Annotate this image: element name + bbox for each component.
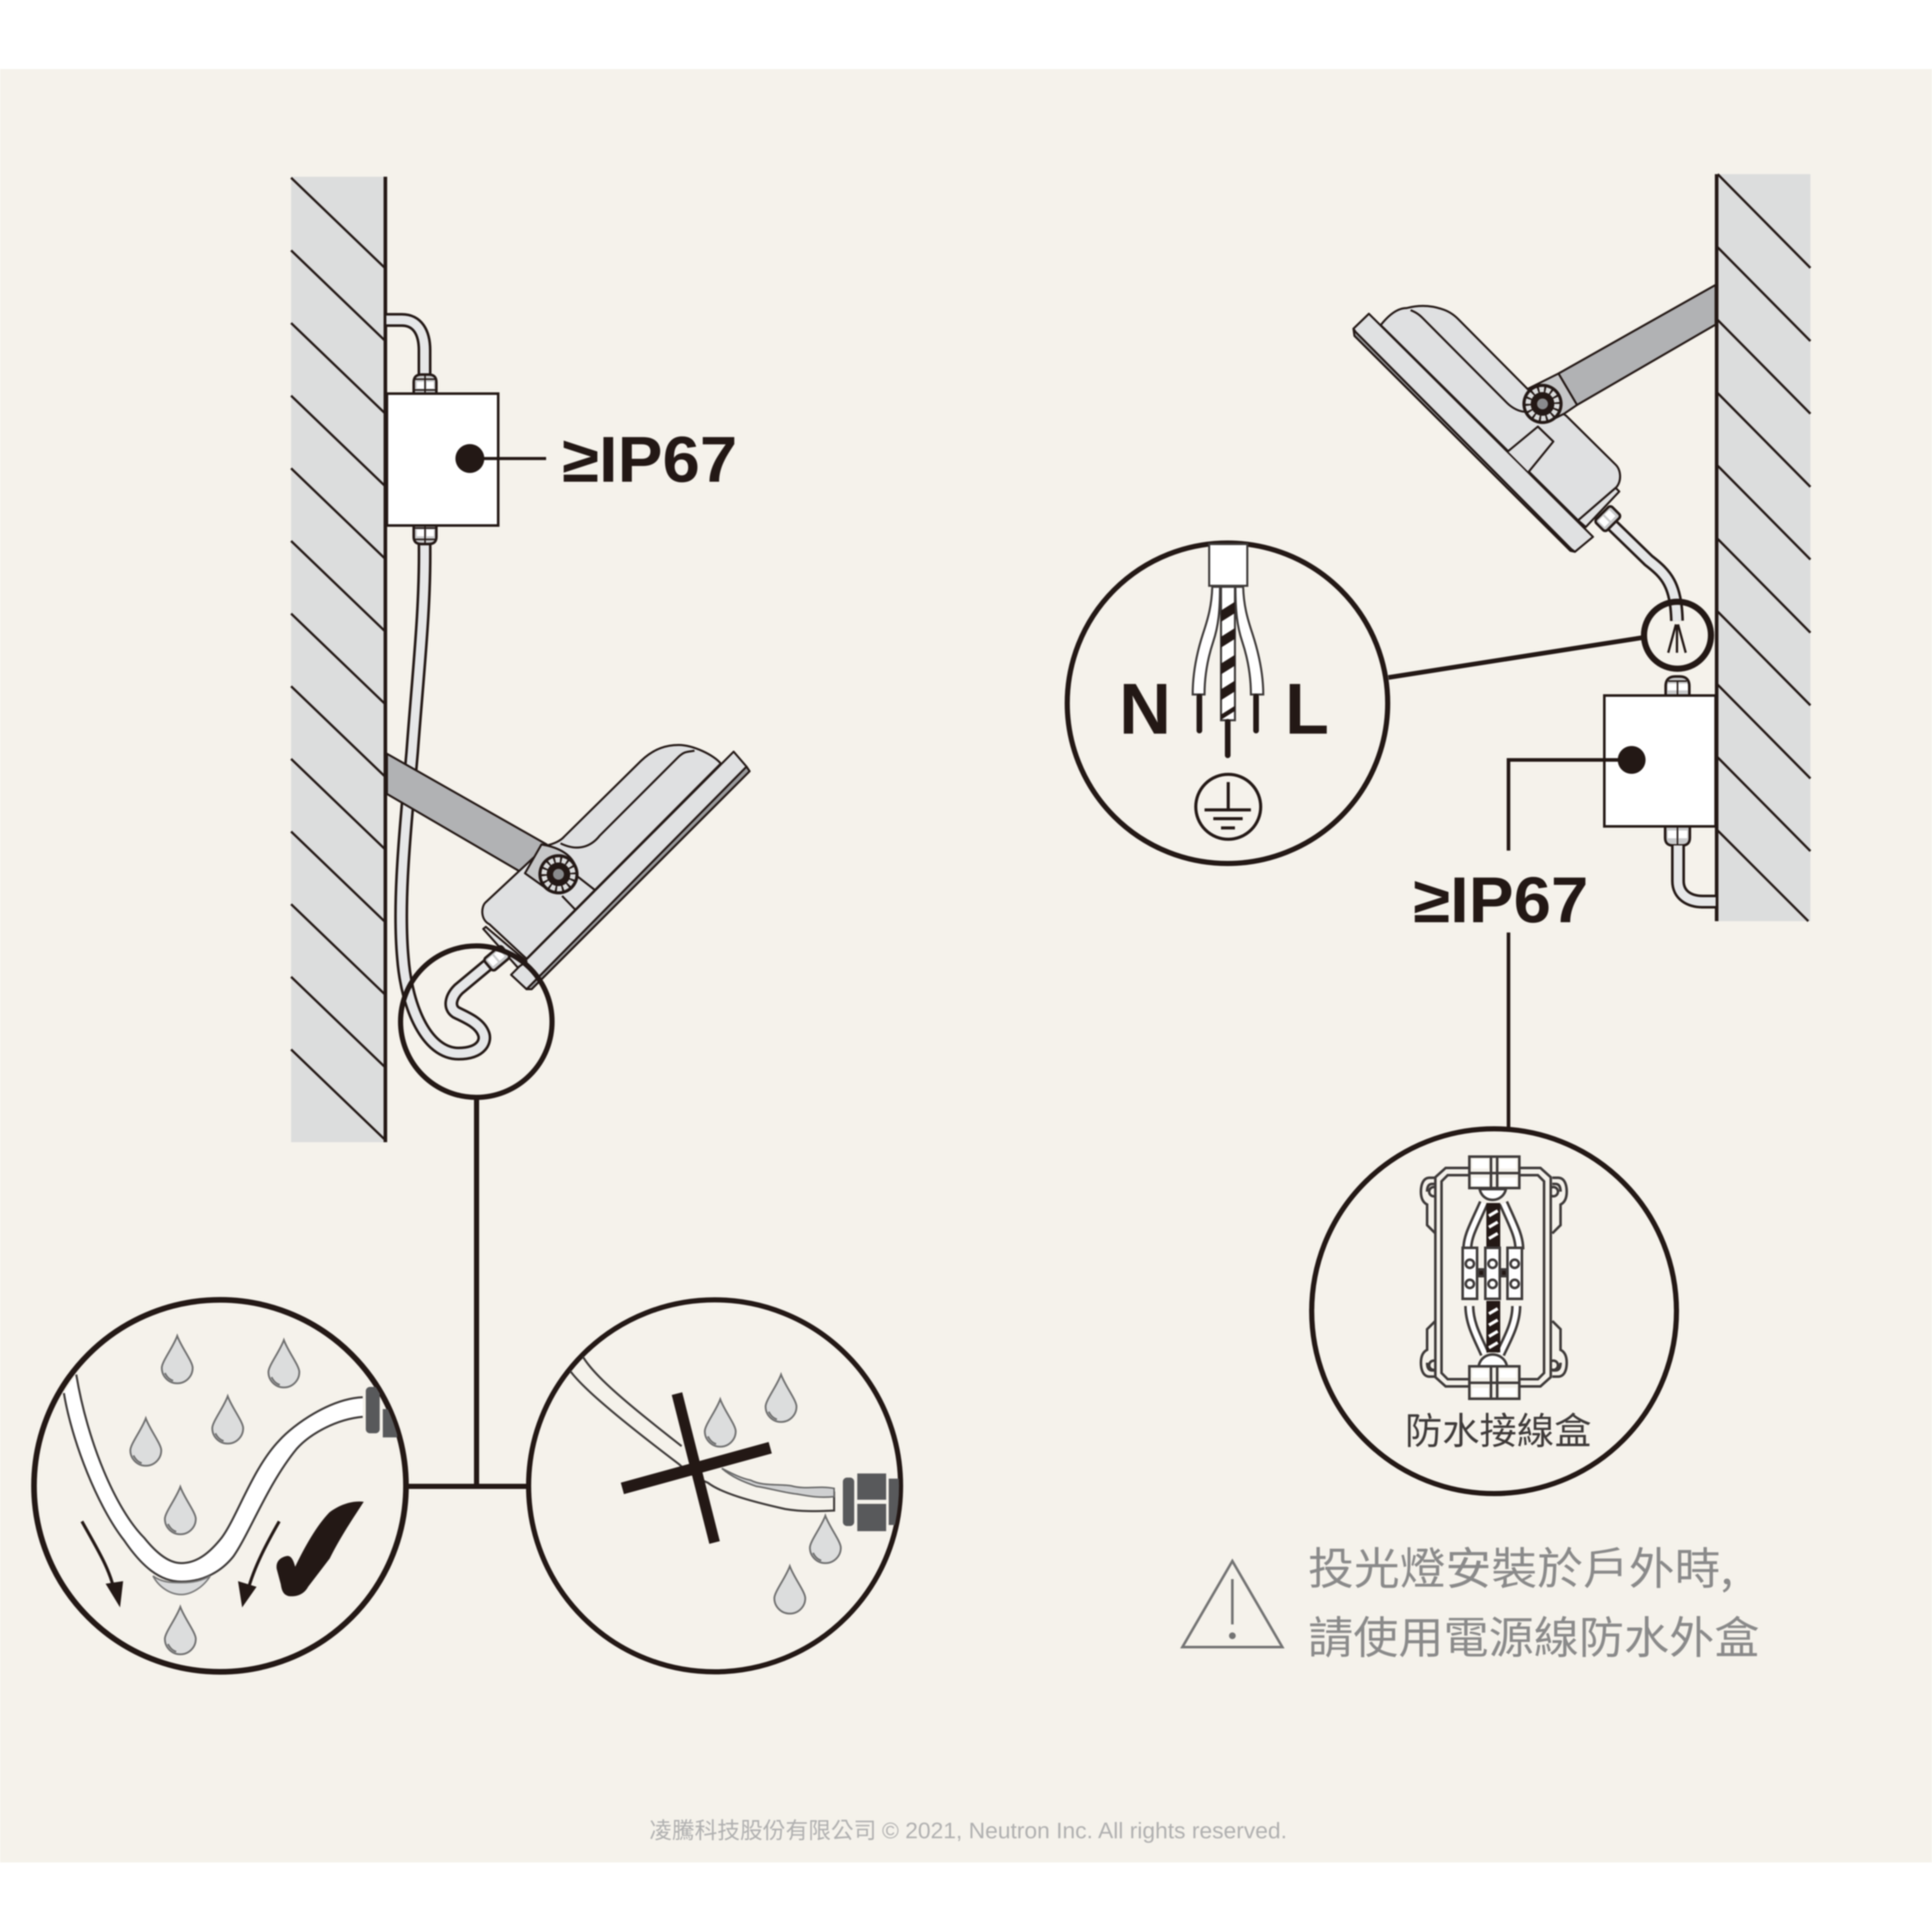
copyright footer: 凌騰科技股份有限公司	[649, 1812, 876, 1845]
right floodlight	[1353, 285, 1716, 552]
water drops	[705, 1375, 841, 1614]
warning triangle icon	[1182, 1561, 1282, 1647]
bottom cable gland	[1665, 826, 1690, 845]
left arrow	[82, 1521, 123, 1607]
right IP67 label: ≥IP67	[1413, 863, 1588, 936]
cross mark	[622, 1394, 770, 1543]
shell label plate	[1508, 427, 1553, 472]
box line drawing	[1421, 1157, 1567, 1399]
exposed wire ends	[1668, 624, 1686, 653]
left floodlight	[387, 745, 750, 989]
terminal blocks	[1463, 1248, 1522, 1299]
correct cable drip loop circle	[34, 1300, 406, 1672]
warning text: 投光燈安裝於戶外時,	[1308, 1533, 1733, 1597]
left wire	[1193, 587, 1220, 694]
mounting arm	[1558, 285, 1716, 405]
left detail circle on cable loop	[401, 946, 552, 1097]
box inner wall	[1442, 1175, 1544, 1379]
striped earth wire	[1221, 587, 1235, 720]
left lamp cable gland	[483, 945, 511, 972]
lamp front strip	[1353, 329, 1575, 552]
check mark	[277, 1501, 364, 1596]
right IP67 leader lines and dot	[1509, 746, 1646, 1131]
top cable gland	[414, 375, 436, 394]
lamp shell	[482, 745, 721, 959]
connector lines to bottom detail circles	[409, 1097, 527, 1486]
lamp front plate	[511, 752, 747, 989]
wires in box	[1467, 1203, 1519, 1354]
water seeping in cable	[722, 1468, 834, 1497]
cable sheath	[1209, 544, 1247, 586]
right lamp cable gland	[1595, 505, 1621, 532]
water drops	[130, 1336, 299, 1654]
shell crease	[1411, 310, 1526, 412]
arm collar	[525, 844, 578, 893]
earth symbol	[1196, 774, 1261, 839]
twisted earth wires	[1486, 1203, 1500, 1352]
L label: L	[1285, 668, 1329, 749]
lamp front plate	[1353, 314, 1593, 552]
cable gland	[366, 1387, 397, 1437]
pivot bolt	[539, 855, 578, 893]
bottom cable gland	[414, 526, 436, 544]
top clamp	[1469, 1157, 1519, 1188]
copyright footer: © 2021, Neutron Inc. All rights reserved.	[882, 1818, 1287, 1843]
wiring detail circle N L earth	[1067, 543, 1388, 863]
arm collar	[1528, 374, 1577, 420]
drip loop cable	[64, 1375, 363, 1582]
right wire	[1235, 587, 1263, 694]
conductors	[1199, 697, 1256, 755]
left junction box	[387, 375, 498, 544]
mounting arm	[387, 754, 547, 873]
bottom clamp	[1469, 1366, 1519, 1399]
incorrect cable circle	[529, 1300, 901, 1672]
right arrow	[238, 1521, 279, 1607]
right wall with hatching	[1717, 174, 1810, 921]
cable to wall	[1678, 845, 1716, 902]
small detail circle on wire ends	[1644, 602, 1711, 669]
left wall with hatching	[291, 177, 386, 1142]
cable gland	[843, 1473, 899, 1531]
cable outline	[567, 1350, 834, 1511]
copyright footer	[649, 1812, 1287, 1845]
N label: N	[1119, 668, 1171, 749]
leader line to wiring detail	[1388, 637, 1645, 677]
box outer wall	[1435, 1168, 1551, 1386]
left IP67 callout dot and leader	[455, 444, 546, 473]
left cable from wall to junction box	[386, 320, 425, 379]
waterproof junction box detail circle	[1312, 1129, 1676, 1494]
lamp front strip	[527, 767, 750, 989]
left cable from junction box to lamp	[401, 541, 489, 1054]
lamp connector strip	[483, 927, 527, 968]
warning text: 請使用電源線防水外盒	[1308, 1602, 1759, 1666]
top cable gland	[1666, 676, 1689, 696]
right lamp cable	[1613, 526, 1677, 621]
water puddle under loop	[153, 1576, 210, 1595]
lamp connector strip	[1578, 488, 1619, 527]
warning text	[1308, 1533, 1759, 1666]
pivot bolt	[1523, 385, 1562, 423]
cable domes	[1480, 1189, 1506, 1200]
junction box label: 防水接線盒	[1405, 1401, 1591, 1455]
shell crease and panel lines	[561, 751, 694, 909]
lamp shell	[1381, 306, 1620, 520]
right junction box	[1604, 676, 1716, 902]
left IP67 label: ≥IP67	[562, 423, 737, 496]
mounting ears	[1421, 1178, 1567, 1377]
